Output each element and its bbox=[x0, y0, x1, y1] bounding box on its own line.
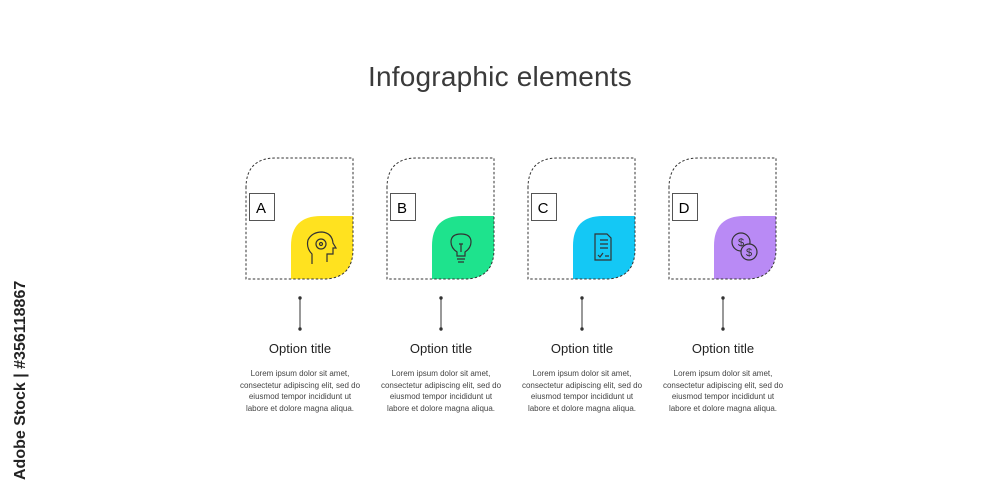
card C: C bbox=[538, 200, 549, 217]
option C text: eiusmod tempor incididunt ut bbox=[531, 392, 633, 401]
option A text: eiusmod tempor incididunt ut bbox=[249, 392, 351, 401]
card A: A bbox=[256, 200, 266, 217]
icon: document bbox=[595, 234, 611, 260]
option B text: Option title bbox=[410, 341, 472, 356]
connector arrows bbox=[299, 297, 724, 330]
option A text: labore et dolore magna aliqua. bbox=[246, 404, 354, 413]
option A text: Lorem ipsum dolor sit amet, bbox=[251, 369, 349, 378]
option D text: Lorem ipsum dolor sit amet, bbox=[674, 369, 772, 378]
icon: coins bbox=[732, 233, 757, 260]
option D text: eiusmod tempor incididunt ut bbox=[672, 392, 774, 401]
card C bbox=[528, 158, 635, 279]
option A text: Option title bbox=[269, 341, 331, 356]
option C text: Lorem ipsum dolor sit amet, bbox=[533, 369, 631, 378]
option C text: consectetur adipiscing elit, sed do bbox=[522, 381, 642, 390]
option A text bbox=[240, 341, 360, 413]
option C text: Option title bbox=[551, 341, 613, 356]
card D: D bbox=[679, 200, 690, 217]
icon: coins: $ bbox=[746, 247, 752, 259]
option B text: eiusmod tempor incididunt ut bbox=[390, 392, 492, 401]
card B: B bbox=[397, 200, 407, 217]
option A text: consectetur adipiscing elit, sed do bbox=[240, 381, 360, 390]
option D text: Option title bbox=[692, 341, 754, 356]
option D text bbox=[663, 341, 783, 413]
icon: light bulb bbox=[451, 234, 471, 262]
card D bbox=[669, 158, 776, 279]
watermark: Adobe Stock | #356118867 bbox=[12, 281, 29, 480]
option B text: consectetur adipiscing elit, sed do bbox=[381, 381, 501, 390]
option B text bbox=[381, 341, 501, 413]
card B bbox=[387, 158, 494, 279]
option B text: labore et dolore magna aliqua. bbox=[387, 404, 495, 413]
option D text: consectetur adipiscing elit, sed do bbox=[663, 381, 783, 390]
option C text bbox=[522, 341, 642, 413]
card A bbox=[246, 158, 353, 279]
option B text: Lorem ipsum dolor sit amet, bbox=[392, 369, 490, 378]
option D text: labore et dolore magna aliqua. bbox=[669, 404, 777, 413]
icon: head gear bbox=[308, 232, 336, 264]
option C text: labore et dolore magna aliqua. bbox=[528, 404, 636, 413]
icon: coins: $ bbox=[738, 237, 744, 249]
title: Infographic elements bbox=[368, 61, 632, 92]
